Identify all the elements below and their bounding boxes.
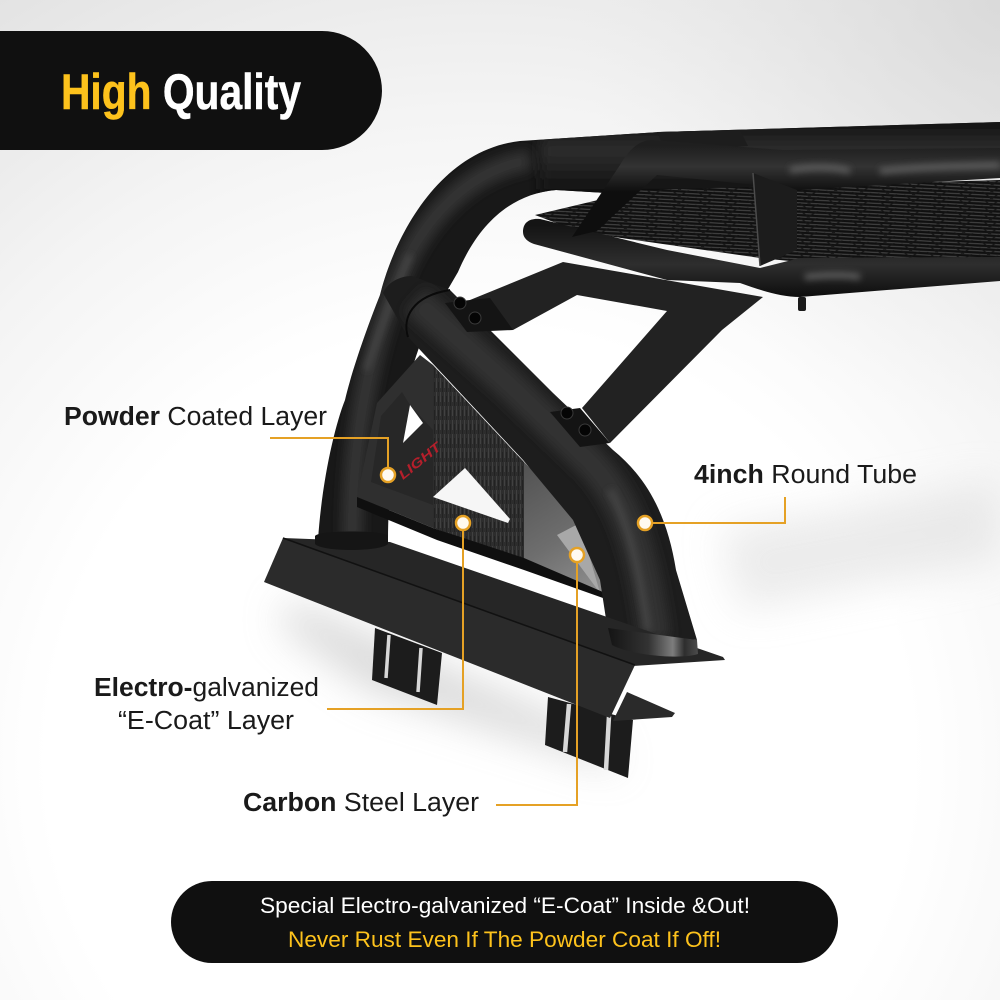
gusset cut-out triangles (403, 405, 423, 443)
gusset plate: lower edge (357, 497, 603, 598)
mesh deck (535, 180, 1000, 262)
bottom brackets (372, 628, 633, 778)
sleeve seam (406, 290, 450, 337)
base plate: top flange (283, 538, 725, 666)
right leg collar (608, 628, 698, 657)
footer line 2: Never Rust Even If The Powder Coat If Off! (288, 927, 721, 952)
callout: electro-galvanized layer (94, 516, 470, 735)
base plate: lower flange (613, 692, 675, 721)
footer line 1: Special Electro-galvanized “E-Coat” Inside &Out! (260, 893, 750, 918)
callout: electro-galvanized layer: “E-Coat” Layer (118, 707, 295, 735)
upper basket rail (572, 146, 1000, 237)
bolted plate lower (550, 408, 610, 447)
callout: 4 inch round tube (638, 461, 917, 530)
callout: electro-galvanized layer: Electro-galvanized (94, 674, 319, 702)
base plate: front face (264, 538, 635, 718)
gusset plate: brushed section (433, 365, 524, 560)
logo: LIGHT (395, 438, 445, 482)
callout: powder coated layer (64, 403, 395, 482)
callout: 4 inch round tube: 4inch Round Tube (694, 461, 917, 489)
upper steel bracket plate (470, 262, 763, 443)
callout: powder coated layer: Powder Coated Layer (64, 403, 328, 431)
main arch tube (318, 122, 1000, 536)
deck bolt (798, 297, 806, 311)
title text: High Quality (61, 64, 301, 120)
gusset plate: matte section (357, 355, 433, 528)
title banner (0, 31, 382, 150)
gusset plate: recessed panel (371, 392, 433, 505)
footer banner (171, 881, 838, 963)
callout: carbon steel layer: Carbon Steel Layer (243, 789, 480, 817)
tube clamp (657, 130, 748, 150)
product: sport bar with basket (264, 122, 1000, 778)
callout: carbon steel layer (243, 548, 584, 817)
bolted plate upper (445, 298, 513, 332)
left leg collar (315, 532, 388, 550)
floor shadows (280, 480, 1000, 770)
basket post (753, 173, 797, 266)
gusset plate: silver section (524, 462, 603, 592)
lower basket rail (523, 218, 1000, 297)
diagonal brace tube (383, 276, 697, 640)
